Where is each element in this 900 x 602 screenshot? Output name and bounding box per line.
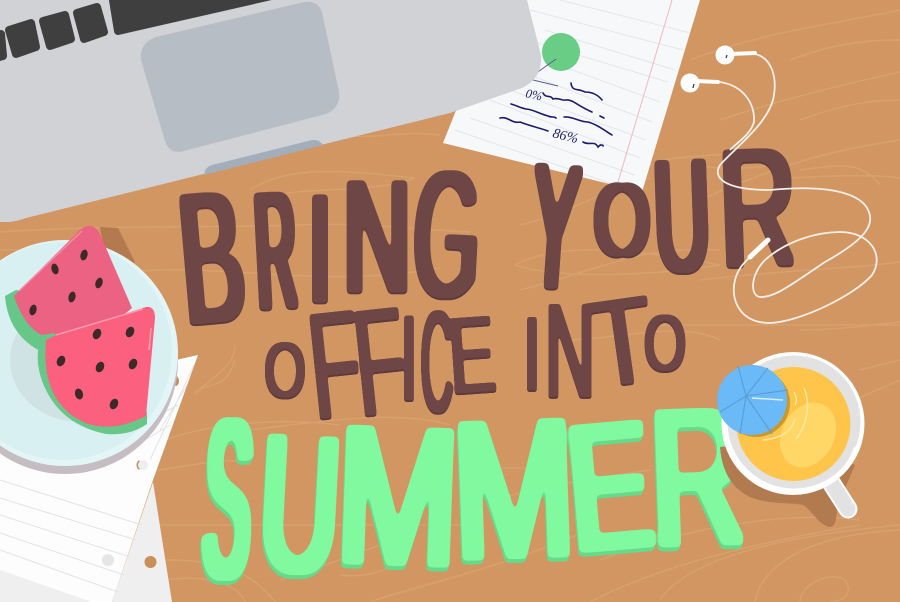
title: SUMMER xyxy=(198,367,749,602)
earbud one xyxy=(716,46,755,64)
paper: top right notes xyxy=(443,0,700,192)
drink umbrella xyxy=(717,365,788,435)
watermelon slice front xyxy=(38,307,155,434)
title: BRING YOUR xyxy=(171,111,800,365)
plate inner shade xyxy=(10,298,150,422)
title: BRING YOUR: Y xyxy=(524,124,586,329)
title: OFFICE INTO: T xyxy=(581,270,663,415)
watermelon slice back xyxy=(5,226,132,352)
front notch xyxy=(204,140,323,175)
plate shadow on desk xyxy=(100,227,135,280)
seeds xyxy=(55,325,139,411)
title: OFFICE INTO: O xyxy=(644,299,686,388)
chart leader line xyxy=(533,59,558,86)
title: BRING YOUR: U xyxy=(651,125,713,308)
note: 0%: 0% xyxy=(524,86,544,103)
title: BRING YOUR: G xyxy=(409,131,485,337)
margin line xyxy=(618,0,672,182)
title: OFFICE INTO: F xyxy=(301,276,369,451)
title: OFFICE INTO: E xyxy=(445,293,499,417)
tea highlight xyxy=(769,393,847,477)
title: BRING YOUR: O xyxy=(594,161,650,279)
title: SUMMER: M xyxy=(449,377,579,601)
tea xyxy=(736,367,850,481)
plate xyxy=(0,240,178,466)
laptop xyxy=(0,0,541,222)
title: OFFICE INTO xyxy=(264,270,686,451)
remote xyxy=(750,240,768,257)
ruled lines xyxy=(0,365,194,592)
title: BRING YOUR: R xyxy=(716,111,800,305)
under sheet xyxy=(112,482,172,602)
handwritten notes xyxy=(500,83,612,147)
umbrella shadow xyxy=(722,369,790,437)
ruled lines xyxy=(455,0,690,190)
title: BRING YOUR: I xyxy=(308,161,332,336)
cup shadow xyxy=(720,440,855,527)
title: SUMMER: E xyxy=(560,382,660,590)
cable xyxy=(718,54,877,323)
earphones xyxy=(680,46,877,323)
rim highlight xyxy=(835,447,855,476)
title: OFFICE INTO: I xyxy=(524,295,540,413)
title: OFFICE INTO: C xyxy=(421,280,453,442)
keyboard keys xyxy=(0,0,280,58)
laptop base xyxy=(0,0,541,222)
title: OFFICE INTO: F xyxy=(346,273,414,448)
cup handle xyxy=(832,484,848,509)
plate with watermelon xyxy=(0,226,178,474)
title: OFFICE INTO: N xyxy=(545,275,595,426)
earbud two xyxy=(680,74,718,92)
title: OFFICE INTO: O xyxy=(264,328,306,414)
reflections xyxy=(763,388,807,440)
trackpad xyxy=(141,2,339,152)
cup body xyxy=(722,352,864,495)
title: SUMMER: R xyxy=(647,367,749,588)
green pie dot xyxy=(542,33,580,71)
title: SUMMER: M xyxy=(333,384,463,602)
title: BRING YOUR: R xyxy=(251,153,301,346)
punch holes xyxy=(144,556,156,568)
tea cup xyxy=(717,352,864,527)
title: OFFICE INTO: I xyxy=(401,288,417,427)
note: 86%: 86% xyxy=(551,126,580,147)
title: BRING YOUR: B xyxy=(171,149,252,365)
plate rim shadow xyxy=(0,248,178,474)
seeds xyxy=(28,249,104,316)
paper: bottom left xyxy=(0,355,198,602)
title: BRING YOUR: N xyxy=(343,147,411,328)
